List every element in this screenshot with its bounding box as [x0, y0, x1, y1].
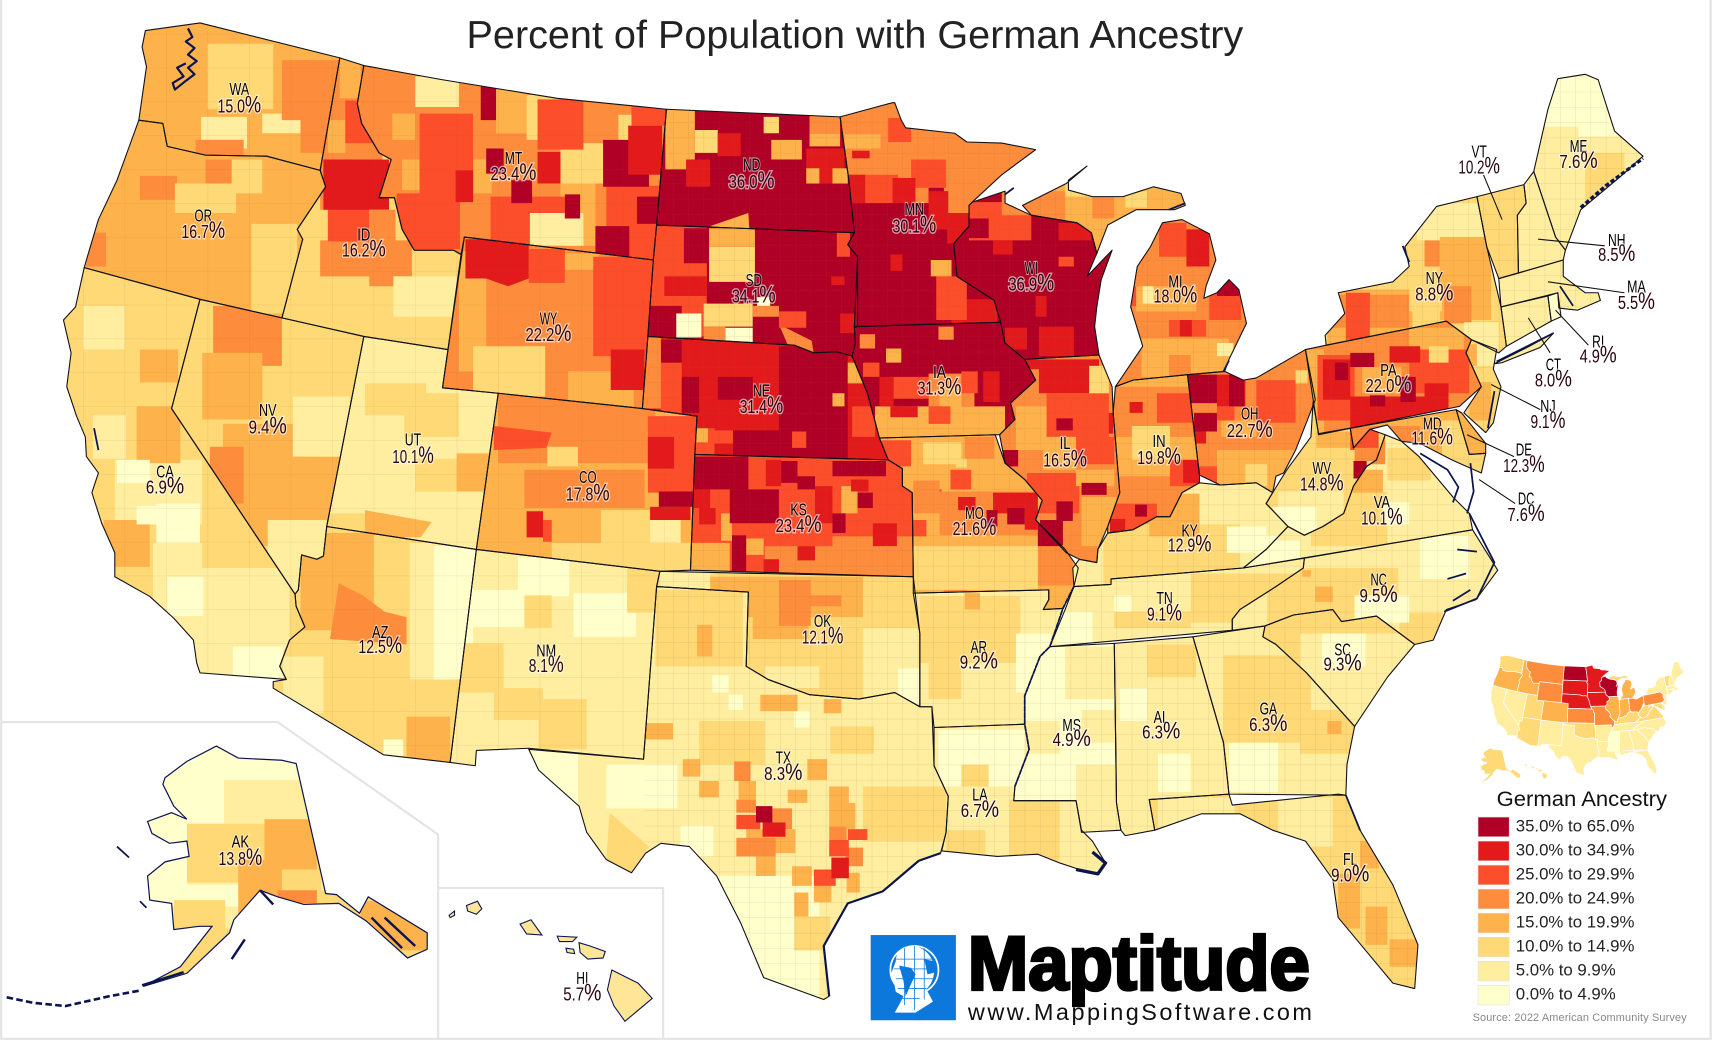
state: Idaho	[282, 58, 461, 350]
label: WY	[526, 308, 571, 347]
label: CA	[146, 461, 184, 500]
label: DE: DE	[1516, 440, 1532, 460]
state: New Jersey	[1464, 340, 1501, 433]
website: www.MappingSoftware.com	[967, 999, 1312, 1025]
label: AR: AR	[971, 637, 987, 657]
label: WY: WY	[540, 308, 557, 328]
label: AZ: 12.5%	[358, 632, 402, 659]
state: Texas	[529, 587, 948, 999]
label: MT: MT	[505, 148, 522, 168]
label: OK: OK	[814, 611, 832, 631]
label: WI: 36.9%	[1008, 270, 1054, 297]
state: Indiana	[1108, 375, 1199, 535]
label: HI	[563, 968, 601, 1007]
label: WV: 14.8%	[1300, 469, 1344, 496]
legend title: German Ancestry	[1497, 787, 1667, 811]
state: Montana	[357, 66, 669, 260]
label: OH: OH	[1241, 403, 1258, 423]
label: SD	[732, 270, 776, 309]
label: NE: NE	[753, 381, 770, 401]
legend row: 30.0% to 34.9%: 30.0% to 34.9%	[1516, 840, 1634, 859]
label: SD: SD	[746, 270, 762, 290]
label: IN: IN	[1153, 431, 1166, 451]
state: Kentucky	[1073, 483, 1289, 587]
legend row: 5.0% to 9.9%	[1478, 960, 1616, 981]
state: Iowa	[852, 322, 1036, 438]
label: MS: MS	[1062, 715, 1081, 735]
label: MD: 11.6%	[1411, 424, 1453, 451]
label: KY	[1168, 520, 1212, 558]
label: NH: NH	[1608, 230, 1626, 250]
state: Maryland	[1350, 410, 1486, 475]
state: Vermont	[1477, 185, 1526, 279]
state: Kansas	[689, 454, 913, 577]
label: RI	[1580, 331, 1617, 369]
state: California	[63, 268, 305, 679]
state: Virginia	[1243, 435, 1473, 568]
label: NV: NV	[259, 400, 277, 420]
logo: Maptitude	[871, 922, 1312, 1025]
state: West Virginia	[1266, 402, 1385, 535]
label: AL	[1142, 707, 1180, 744]
label: MD: MD	[1423, 413, 1441, 433]
label: DC: 7.6%	[1508, 500, 1545, 527]
label: NJ	[1530, 396, 1565, 434]
label: NV: 9.4%	[249, 413, 287, 440]
label: GA: 6.3%	[1249, 710, 1287, 737]
label: OR: 16.7%	[181, 217, 225, 244]
state: Pennsylvania	[1305, 321, 1481, 435]
label: MN: MN	[905, 199, 924, 219]
label: LA	[961, 785, 999, 823]
label: MS	[1053, 715, 1091, 752]
label: NV	[249, 400, 287, 440]
label: AR	[960, 637, 998, 675]
label: MI	[1154, 271, 1197, 309]
label: KY: 12.9%	[1168, 531, 1212, 558]
label: RI: RI	[1592, 331, 1604, 351]
label: WI: WI	[1025, 258, 1038, 278]
label: DE: 12.3%	[1503, 451, 1545, 478]
label: MN: 30.1%	[893, 212, 936, 239]
label: IA	[918, 362, 961, 400]
label: CT: 8.0%	[1535, 366, 1572, 393]
state: North Carolina	[1232, 530, 1498, 644]
label: WV: WV	[1313, 458, 1331, 478]
state: Nebraska	[642, 336, 888, 460]
label: GA	[1249, 698, 1287, 737]
state: Florida	[1149, 794, 1418, 989]
label: SC: SC	[1334, 639, 1351, 659]
legend row: 10.0% to 14.9%: 10.0% to 14.9%	[1516, 936, 1634, 955]
label: IN: 19.8%	[1137, 443, 1181, 470]
label: TX: TX	[776, 748, 791, 768]
label: FL: FL	[1343, 849, 1358, 869]
label: OR: OR	[195, 206, 212, 226]
label: UT	[392, 430, 434, 469]
legend row: 15.0% to 19.9%: 15.0% to 19.9%	[1516, 912, 1634, 931]
label: IA: 31.3%	[918, 373, 961, 400]
state: Michigan (lower peninsula)	[1115, 220, 1246, 387]
label: RI: 4.9%	[1580, 342, 1617, 369]
state: New Hampshire	[1517, 171, 1565, 273]
Alaska outline and island chain	[7, 746, 427, 1006]
label: CO: CO	[579, 467, 597, 487]
label: NC	[1360, 569, 1398, 608]
label: FL: 9.0%	[1331, 861, 1369, 888]
label: KS	[776, 500, 822, 538]
label: TN: 9.1%	[1147, 599, 1182, 626]
label: SC	[1323, 639, 1362, 677]
label: DC: DC	[1518, 489, 1534, 509]
label: KY: KY	[1181, 520, 1198, 540]
label: VA	[1361, 492, 1403, 530]
label: VT: VT	[1471, 141, 1487, 161]
label: OH: 22.7%	[1227, 416, 1273, 443]
label: NH	[1598, 230, 1635, 267]
label: MD	[1411, 413, 1453, 451]
label: HI: HI	[576, 968, 588, 988]
legend row: 0.0% to 4.9%	[1478, 984, 1616, 1005]
label: VT	[1458, 141, 1500, 180]
state: Illinois	[1000, 355, 1120, 563]
label: AL: AL	[1154, 707, 1169, 727]
label: GA: GA	[1260, 698, 1277, 718]
label: MO: MO	[965, 503, 984, 523]
legend row: 25.0% to 29.9%: 25.0% to 29.9%	[1516, 864, 1634, 883]
label: SD: 34.1%	[732, 282, 776, 309]
state: Missouri	[879, 435, 1078, 610]
label: PA	[1366, 360, 1411, 398]
state: Alaska	[131, 743, 432, 989]
label: OR	[181, 206, 225, 244]
label: OH	[1227, 403, 1273, 443]
label: MN	[893, 199, 936, 239]
state: Oklahoma	[657, 571, 920, 707]
state: Mississippi	[1014, 643, 1121, 836]
label: MT	[491, 148, 536, 186]
label: OK	[802, 611, 843, 649]
label: PA: 22.0%	[1366, 371, 1411, 398]
state: South Dakota	[648, 225, 858, 356]
label: ND	[729, 154, 775, 194]
label: AZ: AZ	[372, 622, 389, 642]
label: WA	[217, 79, 261, 119]
label: ID: 16.2%	[342, 236, 386, 263]
state: Maine	[1534, 66, 1643, 250]
label: AR: 9.2%	[960, 648, 998, 675]
label: ID	[342, 224, 386, 263]
state: Tennessee	[1050, 558, 1304, 647]
state: Michigan (upper peninsula)	[1023, 180, 1185, 252]
label: NY	[1415, 268, 1453, 306]
label: AK: AK	[232, 832, 249, 852]
label: NY: 8.8%	[1415, 279, 1453, 306]
label: IN	[1137, 431, 1181, 470]
label: FL	[1331, 849, 1369, 888]
label: LA: LA	[972, 785, 988, 805]
label: DC	[1508, 489, 1545, 527]
label: WV	[1300, 458, 1344, 496]
label: NC: NC	[1370, 569, 1387, 589]
legend	[1478, 787, 1667, 1005]
label: TN: TN	[1156, 588, 1173, 608]
state: Wyoming	[443, 237, 653, 410]
label: IL: IL	[1060, 433, 1071, 453]
label: MO: 21.6%	[953, 514, 996, 541]
label: AL: 6.3%	[1142, 717, 1180, 744]
state labels	[146, 79, 1655, 1007]
label: MO	[953, 503, 996, 541]
state: Colorado	[476, 393, 697, 572]
source note: Source: 2022 American Community Survey	[1473, 1012, 1687, 1024]
label: CA: 6.9%	[146, 473, 184, 500]
state: Oregon	[84, 120, 326, 318]
label: NC: 9.5%	[1360, 581, 1398, 608]
state: Massachusetts	[1499, 260, 1600, 310]
leader lines for small-state labels	[1467, 175, 1624, 504]
label: VT: 10.2%	[1458, 153, 1500, 180]
label: NE: 31.4%	[740, 392, 783, 419]
label: IL: 16.5%	[1043, 445, 1087, 472]
label: NM: 8.1%	[529, 651, 564, 678]
label: DE	[1503, 440, 1545, 478]
label: SC: 9.3%	[1323, 650, 1362, 677]
label: VA: 10.1%	[1361, 503, 1403, 530]
state: South Carolina	[1263, 610, 1420, 732]
label: VA: VA	[1374, 492, 1390, 512]
label: NM	[529, 640, 564, 678]
label: AK: 13.8%	[219, 844, 262, 871]
label: NE	[740, 381, 783, 419]
label: WA: WA	[229, 79, 249, 99]
label: ME: ME	[1570, 136, 1587, 156]
Hawaii islands	[449, 901, 652, 1021]
label: TN	[1147, 588, 1182, 626]
label: ND: ND	[743, 154, 760, 174]
icon: blue square with globe head	[871, 935, 956, 1020]
state: Delaware	[1456, 410, 1486, 454]
state: Wisconsin	[954, 191, 1112, 359]
label: CO	[566, 467, 610, 506]
legend row: 0.0% to 4.9%: 0.0% to 4.9%	[1516, 984, 1616, 1003]
label: NJ: NJ	[1540, 396, 1556, 416]
label: NH: 8.5%	[1598, 240, 1635, 267]
state: Minnesota	[836, 98, 1038, 327]
title: Percent of Population with German Ancestry	[467, 13, 1244, 57]
state: Louisiana	[934, 724, 1106, 874]
label: NY: NY	[1426, 268, 1443, 288]
label: CT: CT	[1546, 354, 1561, 374]
state: Georgia	[1193, 626, 1355, 795]
state: Ohio	[1187, 350, 1315, 500]
state: Alabama	[1114, 637, 1229, 836]
label: CA: CA	[156, 461, 174, 481]
label: AZ	[358, 622, 402, 659]
label: IL	[1043, 433, 1087, 472]
label: HI: 5.7%	[563, 980, 601, 1007]
state: Arkansas	[913, 590, 1063, 727]
label: MA	[1618, 277, 1655, 315]
label: MA: 5.5%	[1618, 288, 1655, 315]
inset frame: Alaska	[1, 722, 438, 1039]
label: CT	[1535, 354, 1572, 393]
label: ME	[1559, 136, 1598, 174]
state: New Mexico	[440, 546, 660, 766]
label: MT: 23.4%	[491, 159, 536, 186]
state: New York	[1325, 197, 1506, 353]
Long Island	[1494, 333, 1553, 364]
label: CO: 17.8%	[566, 479, 610, 506]
label: ME: 7.6%	[1559, 147, 1598, 174]
inset frame: Hawaii	[438, 888, 663, 1039]
label: MA: MA	[1627, 277, 1646, 297]
state: Washington	[139, 23, 340, 170]
label: UT: 10.1%	[392, 442, 434, 469]
legend row: 5.0% to 9.9%: 5.0% to 9.9%	[1516, 960, 1616, 979]
state: Connecticut	[1501, 296, 1551, 346]
state: North Dakota	[657, 109, 854, 233]
legend row: 35.0% to 65.0%: 35.0% to 65.0%	[1516, 816, 1634, 835]
label: ID: ID	[357, 224, 370, 244]
label: UT: UT	[405, 430, 421, 450]
label: WA: 15.0%	[217, 92, 261, 119]
label: LA: 6.7%	[961, 796, 999, 823]
state: Utah	[327, 336, 498, 549]
label: ND: 36.0%	[729, 167, 775, 194]
label: WY: 22.2%	[526, 320, 571, 347]
label: KS: KS	[790, 500, 807, 520]
state: Nevada	[172, 299, 364, 594]
label: PA: PA	[1380, 360, 1397, 380]
label: NJ: 9.1%	[1530, 407, 1565, 434]
label: KS: 23.4%	[776, 511, 822, 538]
label: MI: 18.0%	[1154, 282, 1197, 309]
label: NM: NM	[536, 640, 556, 660]
state: Arizona	[273, 527, 476, 762]
label: MS: 4.9%	[1053, 725, 1091, 752]
label: TX	[764, 748, 802, 786]
label: OK: 12.1%	[802, 622, 843, 649]
label: TX: 8.3%	[764, 759, 802, 786]
label: AK	[219, 832, 262, 871]
wordmark: Maptitude	[968, 922, 1310, 1007]
state: Rhode Island	[1548, 293, 1561, 321]
label: MI: MI	[1168, 271, 1183, 291]
label: WI	[1008, 258, 1054, 297]
locator mini map	[1481, 655, 1684, 782]
label: IA: IA	[933, 362, 946, 382]
legend row: 20.0% to 24.9%: 20.0% to 24.9%	[1516, 888, 1634, 907]
